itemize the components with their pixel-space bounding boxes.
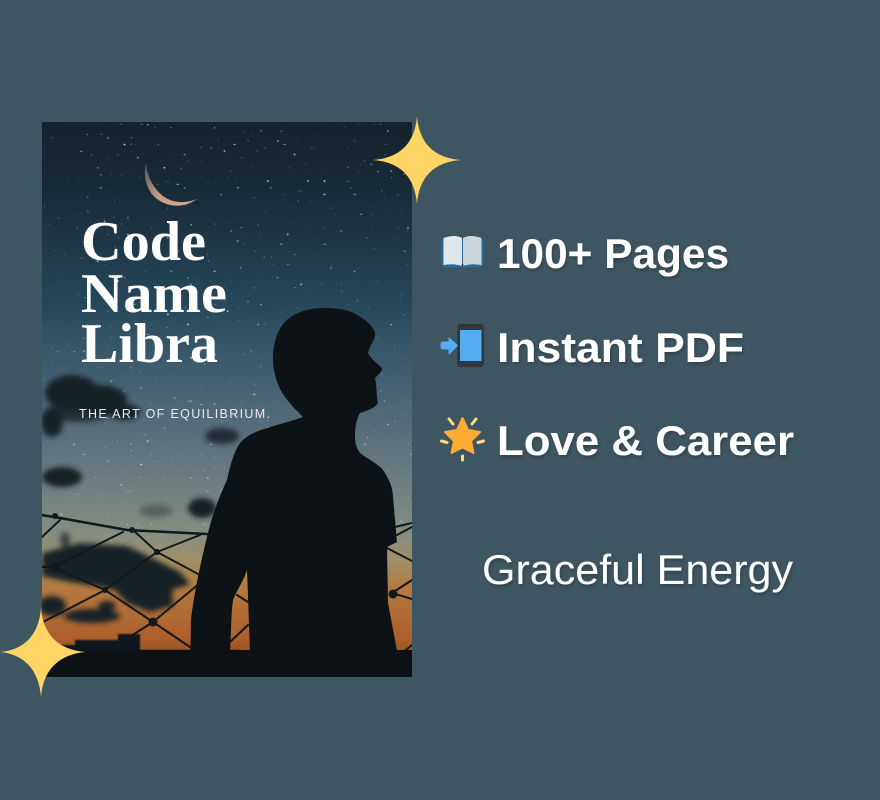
chain-link fence <box>42 515 412 653</box>
night sky gradient <box>42 122 412 677</box>
list item: Love & Career: Love & Career <box>497 417 794 464</box>
distant town skyline <box>60 633 241 650</box>
icon: bottom sparkle <box>0 608 86 697</box>
icon: mobile phone with arrow <box>441 324 484 367</box>
panel: book cover <box>38 122 412 677</box>
star field <box>42 122 412 552</box>
clouds <box>38 375 239 623</box>
tagline: Graceful Energy <box>482 546 793 593</box>
cover title: Name <box>81 263 227 325</box>
list item: 100+ Pages: 100+ Pages <box>497 230 729 277</box>
icon: glowing star <box>442 418 484 460</box>
crescent moon <box>145 163 197 206</box>
fence knots <box>50 513 398 626</box>
cover title: Code <box>81 211 206 273</box>
icon: top sparkle <box>373 116 461 204</box>
cover subtitle: THE ART OF EQUILIBRIUM. <box>79 407 270 421</box>
list item: Instant PDF: Instant PDF <box>497 324 744 371</box>
cover title <box>82 221 226 362</box>
cover title: Libra <box>81 313 218 375</box>
ground <box>42 650 412 677</box>
icon: open book <box>442 236 484 267</box>
silhouette of man <box>190 308 402 677</box>
